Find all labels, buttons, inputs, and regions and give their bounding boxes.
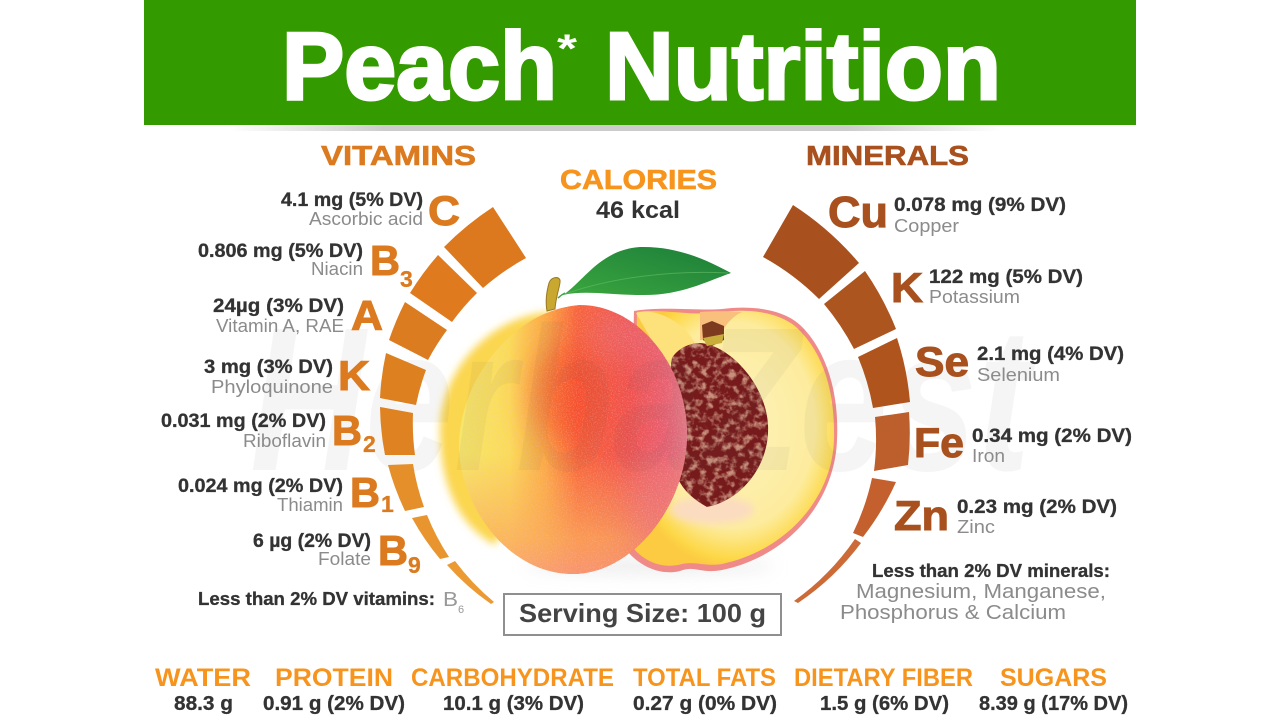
segment: vitamin C bbox=[444, 207, 526, 288]
zinc label: Zinc bbox=[957, 517, 995, 537]
copper label: Cu bbox=[828, 188, 888, 237]
leaf bbox=[558, 247, 731, 298]
vitamin B2 label bbox=[161, 407, 376, 457]
potassium label bbox=[891, 264, 1083, 311]
header banner bbox=[144, 0, 1136, 131]
segment: zinc bbox=[853, 478, 896, 537]
vitamin B9 label: Folate bbox=[318, 549, 371, 569]
trace minerals note: Less than 2% DV minerals: bbox=[872, 561, 1110, 581]
vitamin B9 label bbox=[253, 527, 421, 578]
vitamin C label: C bbox=[428, 187, 460, 234]
panel: vitamins arc bbox=[380, 207, 526, 604]
macro: water: 88.3 g bbox=[174, 693, 233, 715]
heading: minerals: MINERALS bbox=[806, 140, 969, 171]
trace minerals note: Phosphorus & Calcium bbox=[840, 602, 1066, 624]
vitamin B2 label: Riboflavin bbox=[243, 431, 326, 451]
vitamin K label: Phyloquinone bbox=[211, 377, 333, 397]
macro: protein bbox=[263, 664, 405, 715]
macro: water: WATER bbox=[155, 664, 251, 692]
trace vitamins note: Less than 2% DV vitamins: bbox=[198, 589, 435, 609]
macro: total fats: TOTAL FATS bbox=[633, 664, 776, 692]
title: Peach bbox=[282, 13, 557, 120]
trace minerals note bbox=[840, 561, 1110, 624]
trace vitamins note: B bbox=[443, 589, 458, 611]
peach illustration bbox=[440, 247, 837, 580]
calories: 46 kcal bbox=[596, 197, 680, 224]
selenium label: Se bbox=[915, 338, 969, 385]
segment: vitamin B9 bbox=[412, 515, 449, 559]
copper label: Copper bbox=[894, 216, 959, 236]
vitamin A label bbox=[213, 292, 383, 339]
title bbox=[282, 13, 1001, 120]
selenium label: 2.1 mg (4% DV) bbox=[977, 344, 1124, 365]
back of whole peach bbox=[440, 312, 570, 545]
vitamin C label bbox=[281, 187, 460, 234]
potassium label: 122 mg (5% DV) bbox=[929, 267, 1083, 288]
trace minerals note: Magnesium, Manganese, bbox=[856, 581, 1106, 603]
vitamin B2 label: 2 bbox=[363, 431, 376, 457]
iron label: Fe bbox=[914, 419, 964, 466]
macro: sugars bbox=[979, 664, 1128, 715]
vitamin B1 label: B bbox=[350, 469, 380, 516]
selenium label bbox=[915, 338, 1124, 385]
vitamin B1 label bbox=[178, 469, 394, 517]
zinc label: 0.23 mg (2% DV) bbox=[957, 497, 1117, 518]
vitamin A label: 24µg (3% DV) bbox=[213, 296, 344, 317]
fruit stone bbox=[670, 321, 768, 507]
vitamin B3 label: B bbox=[370, 237, 400, 284]
copper label: 0.078 mg (9% DV) bbox=[894, 195, 1066, 216]
vitamin B3 label: 3 bbox=[400, 266, 413, 292]
vitamin B9 label: 6 µg (2% DV) bbox=[253, 531, 371, 552]
segment: selenium bbox=[858, 338, 910, 408]
panel: minerals arc bbox=[763, 205, 910, 603]
vitamin B1 label: 0.024 mg (2% DV) bbox=[178, 476, 343, 497]
serving size box bbox=[504, 594, 781, 635]
serving size box: Serving Size: 100 g bbox=[519, 598, 766, 628]
vitamin B9 label: 9 bbox=[408, 552, 421, 578]
potassium label: K bbox=[891, 264, 923, 311]
zinc label: Zn bbox=[894, 492, 949, 539]
vitamin C label: Ascorbic acid bbox=[309, 209, 423, 229]
macro: dietary fiber: DIETARY FIBER bbox=[794, 664, 973, 692]
vitamin A label: Vitamin A, RAE bbox=[216, 316, 344, 336]
vitamin B1 label: Thiamin bbox=[277, 495, 343, 515]
segment: copper bbox=[763, 205, 859, 299]
copper label bbox=[828, 188, 1066, 237]
segment: vitamin B2 bbox=[380, 407, 415, 455]
segment: iron bbox=[874, 412, 910, 471]
zinc label bbox=[894, 492, 1117, 539]
vitamin K label bbox=[204, 352, 370, 399]
segment: potassium bbox=[824, 271, 896, 349]
macro: water bbox=[155, 664, 251, 715]
macro: carbohydrate bbox=[411, 664, 614, 715]
iron label: 0.34 mg (2% DV) bbox=[972, 426, 1132, 447]
segment: vitamin K bbox=[380, 353, 426, 405]
vitamin A label: A bbox=[351, 292, 383, 339]
macro: total fats: 0.27 g (0% DV) bbox=[633, 693, 777, 715]
stem bbox=[546, 278, 560, 311]
iron label bbox=[914, 419, 1132, 466]
macro: dietary fiber: 1.5 g (6% DV) bbox=[820, 693, 949, 715]
trace vitamins note: 6 bbox=[458, 604, 464, 616]
macro: protein: PROTEIN bbox=[275, 664, 393, 692]
macro: carbohydrate: 10.1 g (3% DV) bbox=[443, 693, 584, 715]
vitamin C label: 4.1 mg (5% DV) bbox=[281, 190, 423, 211]
vitamin K label: 3 mg (3% DV) bbox=[204, 357, 333, 378]
segment: vitamin B3 bbox=[410, 255, 477, 322]
vitamin B2 label: B bbox=[332, 407, 362, 454]
selenium label: Selenium bbox=[977, 365, 1060, 385]
title: * bbox=[557, 27, 578, 71]
cut peach half bbox=[628, 308, 837, 572]
calories: CALORIES bbox=[560, 164, 717, 195]
watermark: HerbaZest bbox=[250, 285, 1036, 514]
macro: carbohydrate: CARBOHYDRATE bbox=[411, 664, 614, 692]
macro: protein: 0.91 g (2% DV) bbox=[263, 693, 405, 715]
calories bbox=[560, 164, 717, 224]
vitamin B3 label bbox=[198, 237, 413, 292]
vitamin B2 label: 0.031 mg (2% DV) bbox=[161, 411, 326, 432]
segment: vitamin A bbox=[389, 302, 447, 360]
macro: total fats bbox=[633, 664, 777, 715]
potassium label: Potassium bbox=[929, 287, 1020, 307]
vitamin B9 label: B bbox=[378, 527, 408, 574]
vitamin K label: K bbox=[338, 352, 370, 399]
whole peach bbox=[459, 305, 688, 574]
segment: vitamin B1 bbox=[388, 464, 424, 511]
title: Nutrition bbox=[605, 13, 1001, 120]
trace vitamins note bbox=[198, 589, 464, 616]
heading: vitamins: VITAMINS bbox=[321, 140, 476, 171]
macro: sugars: 8.39 g (17% DV) bbox=[979, 693, 1128, 715]
macro: dietary fiber bbox=[794, 664, 973, 715]
vitamin B3 label: 0.806 mg (5% DV) bbox=[198, 241, 363, 262]
segment: vitamin B6 bbox=[447, 561, 494, 604]
vitamin B3 label: Niacin bbox=[311, 259, 363, 279]
segment: trace minerals bbox=[794, 539, 861, 603]
macro: sugars: SUGARS bbox=[1000, 664, 1107, 692]
vitamin B1 label: 1 bbox=[381, 491, 394, 517]
iron label: Iron bbox=[972, 446, 1005, 466]
